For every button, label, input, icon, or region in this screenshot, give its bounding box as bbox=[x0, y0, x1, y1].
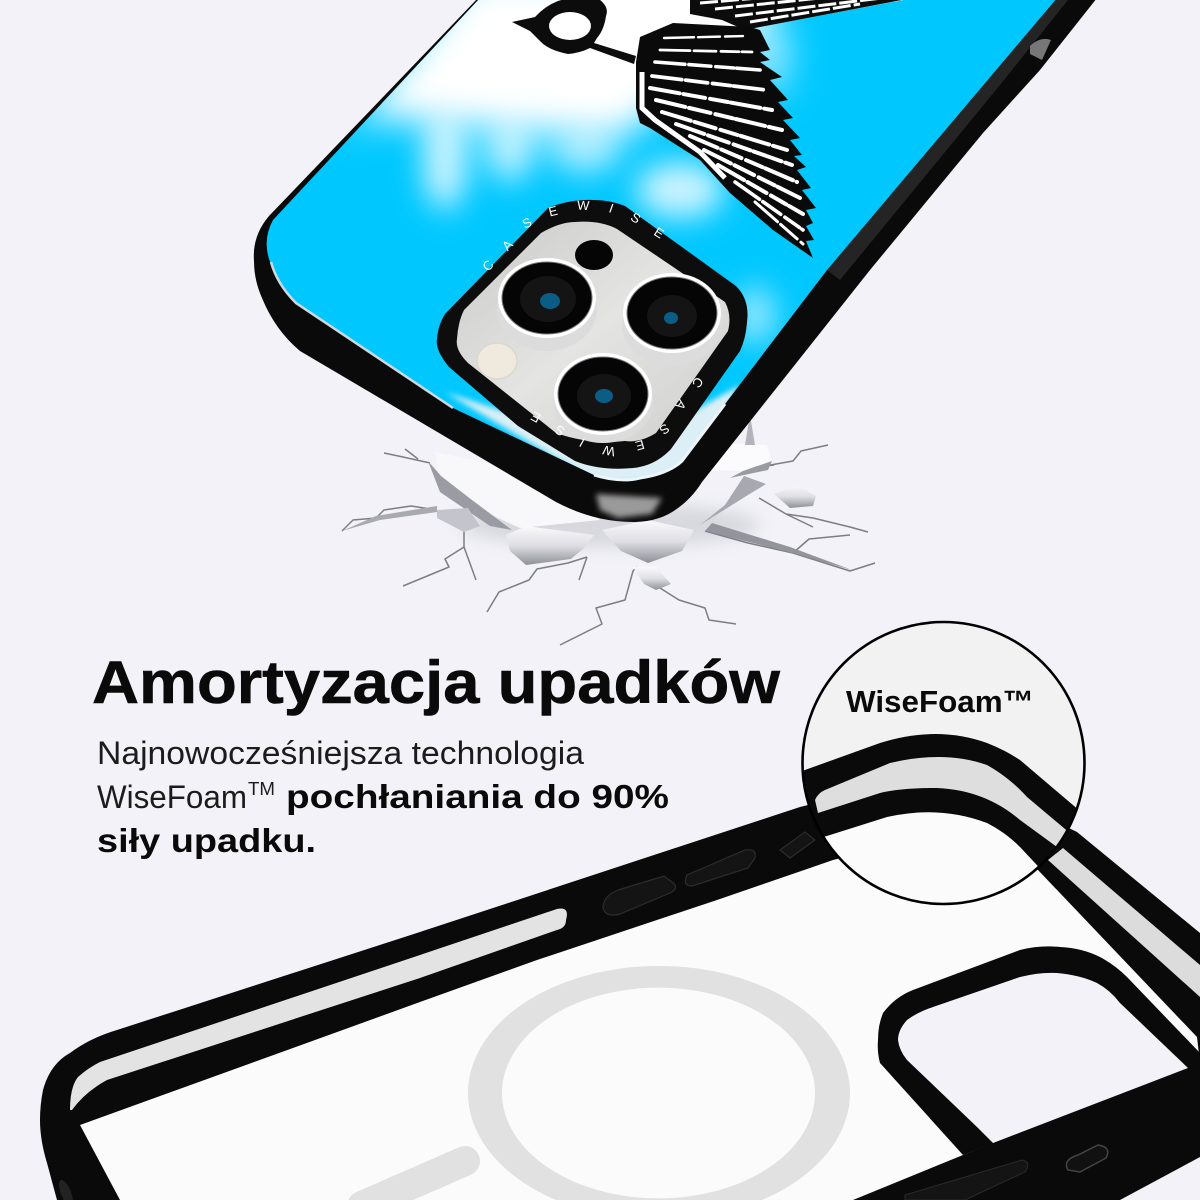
lens 3 bbox=[553, 353, 653, 443]
cracked ground bbox=[342, 415, 875, 645]
right foam slot bbox=[1048, 848, 1200, 997]
magnified case corner bbox=[804, 734, 1076, 868]
bird body hatching bbox=[690, 0, 904, 28]
lens 2 bbox=[622, 273, 722, 366]
camera cutout frame bbox=[878, 946, 1200, 1155]
left broken rim bbox=[435, 452, 600, 528]
wing feather stripes bbox=[650, 36, 803, 244]
circle outline bbox=[802, 622, 1084, 904]
top phone case bbox=[254, 0, 1096, 522]
body copy bbox=[97, 735, 669, 859]
case outer shell bbox=[254, 0, 1097, 522]
line 2 brand: WiseFoam bbox=[97, 779, 247, 815]
line 2 bold: pochłaniania do 90% bbox=[286, 778, 669, 815]
left charging hole bbox=[56, 1178, 76, 1200]
rock right side bbox=[700, 476, 766, 525]
lower case black frame bbox=[40, 770, 1200, 1200]
bird bbox=[512, 0, 930, 258]
case right rim tone bbox=[827, 0, 1068, 280]
small rock left bbox=[437, 508, 480, 532]
screen bbox=[266, 0, 1056, 478]
circle label: WiseFoam™ bbox=[846, 684, 1034, 719]
rock small lower bbox=[633, 567, 671, 590]
camera plate bbox=[457, 222, 729, 442]
lens 1 bbox=[497, 258, 597, 351]
wing white edge bbox=[642, 72, 725, 178]
magnetic pill bbox=[362, 1161, 465, 1200]
bottom button bbox=[905, 1160, 1028, 1200]
bird head bbox=[512, 0, 636, 64]
lower clear case bbox=[40, 770, 1200, 1200]
bird body white bbox=[600, 0, 904, 26]
ground shadow bbox=[460, 503, 760, 547]
flash bbox=[477, 343, 517, 379]
sky wisps bbox=[423, 110, 775, 343]
side button gloss bbox=[1030, 39, 1051, 60]
wedge cracks bbox=[705, 523, 852, 570]
camera cutout opening bbox=[898, 973, 1188, 1143]
case glossy highlight bbox=[596, 494, 662, 518]
rock bottom left bbox=[506, 526, 594, 565]
case bottom lip bbox=[594, 404, 725, 480]
left foam slot bbox=[70, 908, 567, 1110]
rock bottom middle bbox=[602, 520, 694, 563]
case rim lip bbox=[271, 262, 453, 408]
sky clouds bbox=[345, 0, 790, 138]
pale strip under camera bbox=[445, 385, 740, 485]
wing bbox=[636, 23, 816, 258]
crack lines bbox=[342, 445, 875, 645]
bird eye patch bbox=[549, 12, 591, 40]
brand text bottom: CASEWISE bbox=[530, 378, 702, 456]
lower case circle backdrop bbox=[802, 622, 1084, 904]
line 3 bold: siły upadku. bbox=[97, 822, 316, 859]
lens hole bbox=[575, 240, 613, 270]
brand text top: CASEWISE bbox=[462, 200, 664, 314]
magnifier circle bbox=[801, 620, 1086, 906]
brand path guides bbox=[488, 210, 690, 272]
rock small right bbox=[774, 485, 816, 508]
lower case clear interior bbox=[80, 830, 1200, 1200]
magnetic ring bbox=[468, 966, 850, 1200]
title: Amortyzacja upadków bbox=[92, 649, 780, 716]
line 2 trademark: TM bbox=[248, 779, 275, 799]
brand path guide bottom bbox=[510, 376, 697, 446]
bottom port bbox=[1066, 1145, 1108, 1172]
camera module bbox=[397, 200, 748, 480]
side buttons bbox=[603, 832, 815, 915]
camera surround bbox=[437, 200, 748, 469]
line 1: Najnowocześniejsza technologia bbox=[97, 735, 584, 771]
